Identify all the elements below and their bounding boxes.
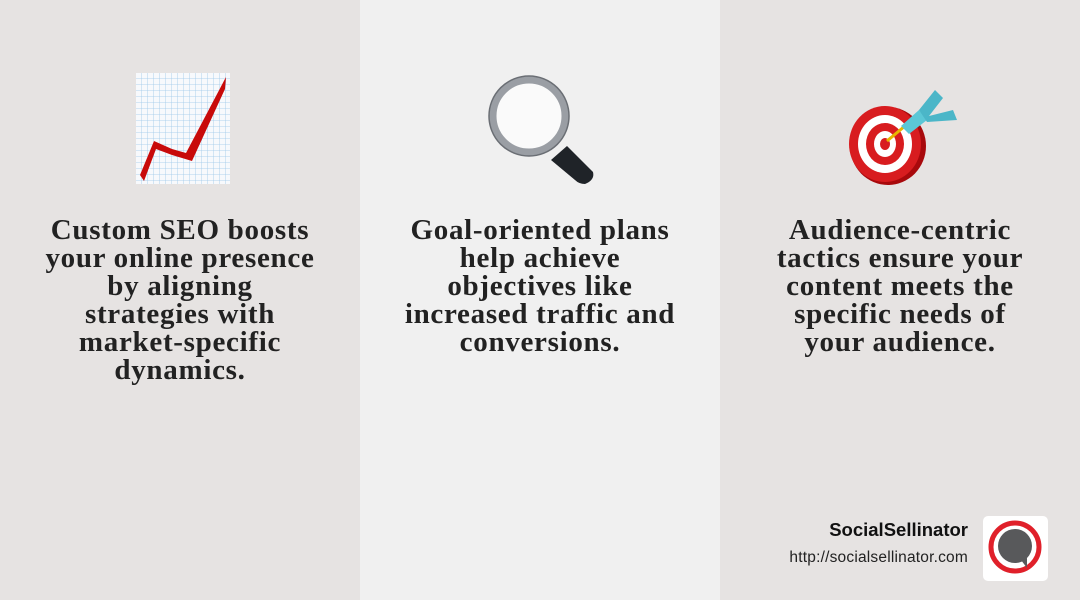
text: custom SEO: market-specific bbox=[79, 326, 281, 358]
text: audience-centric bbox=[777, 214, 1023, 358]
icon: chart bbox=[136, 73, 230, 184]
text: custom SEO: your online presence bbox=[45, 242, 315, 274]
panel: right bbox=[720, 0, 1080, 600]
text: custom SEO: dynamics. bbox=[114, 354, 246, 386]
text: audience-centric: Audience-centric bbox=[789, 214, 1011, 246]
brand name: SocialSellinator bbox=[829, 519, 968, 540]
icon: magnifier bbox=[488, 75, 594, 184]
panel: middle bbox=[360, 0, 720, 600]
text: audience-centric: your audience. bbox=[804, 326, 996, 358]
text: goal-oriented bbox=[405, 214, 675, 358]
text: custom SEO: by aligning bbox=[107, 270, 253, 302]
text: goal-oriented: increased traffic and bbox=[405, 298, 675, 330]
text: audience-centric: content meets the bbox=[786, 270, 1014, 302]
text: audience-centric: tactics ensure your bbox=[777, 242, 1023, 274]
text: custom SEO: Custom SEO boosts bbox=[51, 214, 309, 246]
brand block bbox=[789, 516, 1048, 581]
logo bbox=[983, 516, 1048, 581]
icon: target bbox=[849, 90, 957, 185]
panel: left bbox=[0, 0, 360, 600]
text: goal-oriented: Goal-oriented plans bbox=[410, 214, 670, 246]
text: custom SEO: strategies with bbox=[85, 298, 275, 330]
text: goal-oriented: objectives like bbox=[447, 270, 633, 302]
text: custom SEO bbox=[45, 214, 315, 386]
text: goal-oriented: help achieve bbox=[460, 242, 620, 274]
brand url: http://socialsellinator.com bbox=[789, 549, 968, 566]
text: goal-oriented: conversions. bbox=[460, 326, 620, 358]
text: audience-centric: specific needs of bbox=[794, 298, 1006, 330]
